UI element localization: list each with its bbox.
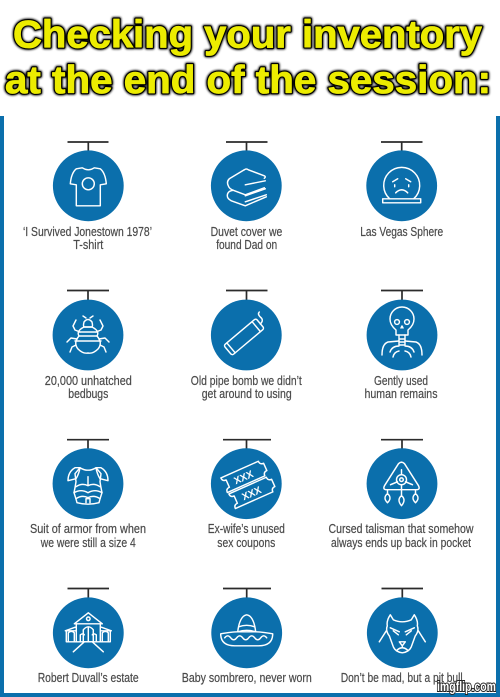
- item: pipe bomb: get around to using: [202, 387, 292, 401]
- icon: bedbug: [67, 316, 109, 353]
- title: Checking your inventory: [13, 14, 482, 56]
- item: talisman: [328, 440, 474, 550]
- item: Las Vegas Sphere: Las Vegas Sphere: [360, 225, 443, 239]
- item: coupons: [208, 440, 285, 550]
- title: at the end of the session:: [5, 59, 491, 102]
- item: pipe bomb: Old pipe bomb we didn’t: [191, 374, 302, 388]
- icon: pit bull: [379, 615, 425, 653]
- item: Las Vegas Sphere: [360, 142, 443, 239]
- item: human remains: Gently used: [374, 374, 428, 388]
- title: at the end of the session:: [5, 59, 491, 102]
- item: armor: [30, 440, 146, 550]
- item: bedbugs: [45, 290, 132, 401]
- item: duvet cover: Duvet cover we: [211, 225, 282, 239]
- item: pipe bomb: [191, 290, 302, 401]
- item: sombrero: Baby sombrero, never worn: [182, 671, 312, 685]
- icon: sad sphere: [383, 167, 421, 203]
- item: talisman: Cursed talisman that somehow: [328, 522, 474, 536]
- item: coupons: sex coupons: [217, 536, 275, 550]
- item: human remains: [364, 290, 438, 401]
- icon: talisman: [384, 462, 419, 506]
- icon: skeleton: [382, 307, 422, 357]
- icon: folded duvet: [227, 169, 266, 206]
- icon: t-shirt: [70, 168, 106, 206]
- icon: estate: [65, 613, 111, 652]
- item: t-shirt: ‘I Survived Jonestown 1978’: [23, 225, 152, 239]
- item: duvet cover: found Dad on: [216, 238, 277, 252]
- item: estate: [38, 588, 139, 685]
- item: t-shirt: [23, 142, 152, 252]
- title: Checking your inventory: [13, 14, 482, 56]
- item: sombrero: [182, 588, 312, 685]
- title: [5, 14, 491, 102]
- icon: armor: [68, 468, 108, 504]
- item: estate: Robert Duvall’s estate: [38, 671, 139, 685]
- item: bedbugs: bedbugs: [68, 387, 108, 401]
- item: t-shirt: T-shirt: [73, 238, 104, 252]
- title: Checking your inventory: [13, 14, 482, 56]
- item: pit bull: [341, 588, 463, 685]
- icon: pipe bomb: [224, 312, 264, 355]
- item: bedbugs: 20,000 unhatched: [45, 374, 132, 388]
- item: armor: we were still a size 4: [40, 536, 136, 550]
- item: armor: Suit of armor from when: [30, 522, 146, 536]
- item: duvet cover: [211, 142, 282, 252]
- icon: coupons: XXX: [233, 469, 256, 487]
- icon: coupons: XXX: [241, 485, 264, 503]
- item: talisman: always ends up back in pocket: [331, 536, 471, 550]
- icon: sombrero: [221, 615, 273, 646]
- item: human remains: human remains: [364, 387, 438, 401]
- item: coupons: Ex-wife’s unused: [208, 522, 285, 536]
- item: pit bull: Don’t be mad, but a pit bull: [341, 671, 463, 685]
- icon: coupons: [221, 460, 276, 509]
- title: at the end of the session:: [5, 59, 491, 102]
